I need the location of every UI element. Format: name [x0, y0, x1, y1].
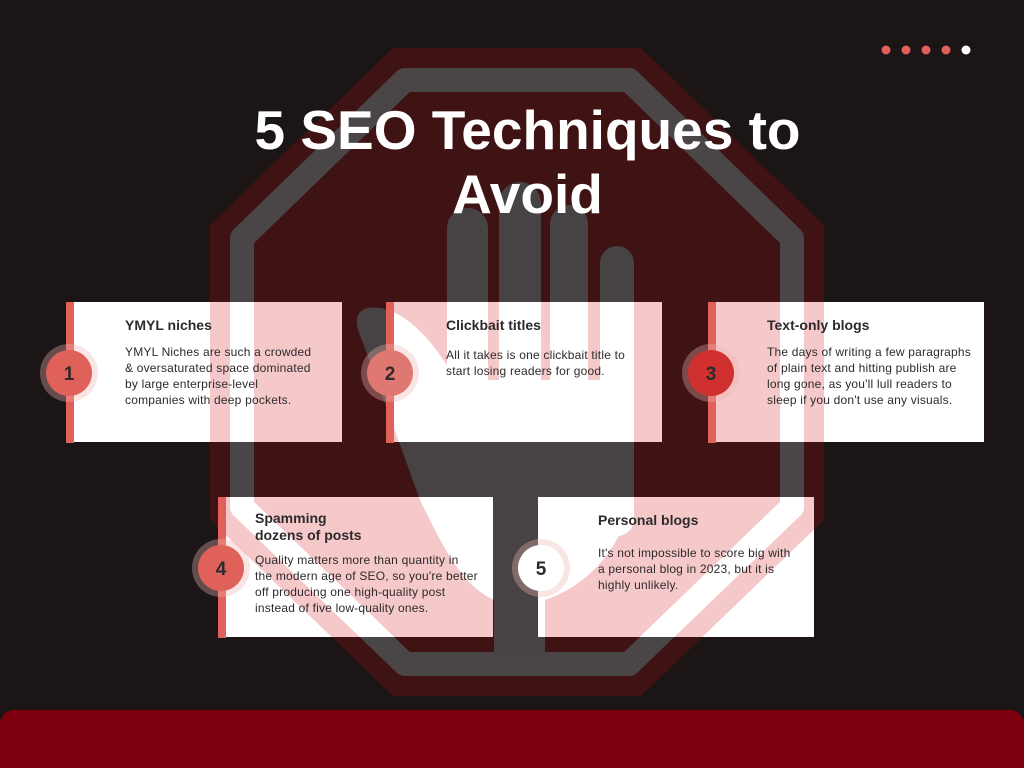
card 1 text: by large enterprise-level	[125, 377, 258, 391]
card 3 text: sleep if you don't use any visuals.	[767, 393, 952, 407]
card 3 text: long gone, as you'll lull readers to	[767, 377, 952, 391]
card 2 text: All it takes is one clickbait title to	[446, 348, 625, 362]
number circle 3: 3	[706, 364, 716, 385]
card 1 text: & oversaturated space dominated	[125, 361, 311, 375]
number circle 1: 1	[64, 364, 75, 385]
card 4 text: instead of five low-quality ones.	[255, 601, 428, 615]
number circle 2	[361, 344, 419, 402]
card 4 text: the modern age of SEO, so you're better	[255, 569, 478, 583]
card accent bars	[66, 302, 716, 638]
number circle 4	[192, 539, 250, 597]
stop sign octagon	[210, 48, 824, 696]
card 2 text	[446, 317, 625, 378]
card 5 text	[598, 512, 790, 592]
card 4 text: off producing one high-quality post	[255, 585, 445, 599]
card 4 text: Quality matters more than quantity in	[255, 553, 458, 567]
number circle 2: 2	[385, 364, 395, 385]
card 1 text: YMYL Niches are such a crowded	[125, 345, 311, 359]
title	[254, 99, 801, 225]
card 1 text: YMYL niches	[125, 317, 212, 333]
overlay of stop sign on cards	[210, 302, 824, 637]
card 2 text: Clickbait titles	[446, 317, 541, 333]
card 5 text: a personal blog in 2023, but it is	[598, 562, 774, 576]
title: 5 SEO Techniques to	[254, 99, 801, 161]
card 4 text: dozens of posts	[255, 527, 362, 543]
card 4 text: Spamming	[255, 510, 327, 526]
number circle 1	[40, 344, 98, 402]
title: Avoid	[452, 163, 603, 225]
card 5 text: It's not impossible to score big with	[598, 546, 790, 560]
card 5 text: Personal blogs	[598, 512, 698, 528]
icon: stop hand	[357, 182, 634, 655]
card 1 text	[125, 317, 311, 407]
card 5 text: highly unlikely.	[598, 578, 678, 592]
number circle 5: 5	[536, 559, 547, 580]
card 3 text: The days of writing a few paragraphs	[767, 345, 971, 359]
card 3 text: Text-only blogs	[767, 317, 869, 333]
card 4 text	[255, 510, 478, 615]
number circle 5	[512, 539, 570, 597]
bottom bar	[0, 710, 1024, 768]
cards backgrounds	[74, 302, 984, 637]
number circle 3	[682, 344, 740, 402]
card 2 text: start losing readers for good.	[446, 364, 605, 378]
number circle 4: 4	[216, 559, 227, 580]
card 3 text	[767, 317, 971, 407]
card 1 text: companies with deep pockets.	[125, 393, 291, 407]
card 3 text: of plain text and hitting publish are	[767, 361, 957, 375]
page indicator dots	[882, 46, 970, 54]
